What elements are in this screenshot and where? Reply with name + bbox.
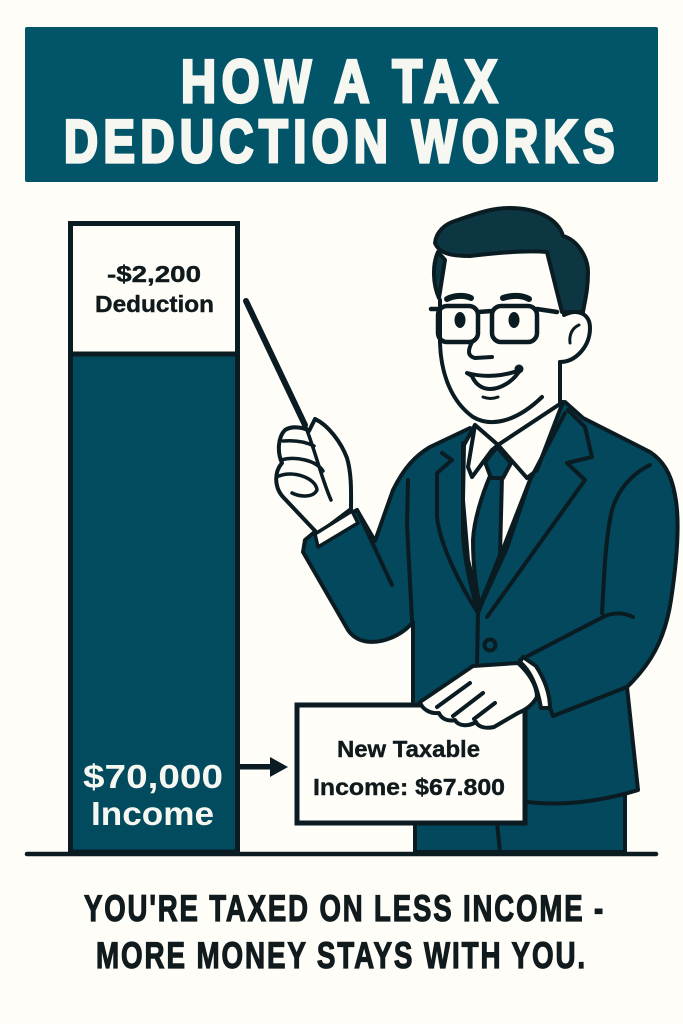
lower cuff [520,657,550,708]
ground line [27,852,656,856]
pointing hand [276,419,351,534]
sign: new taxable income: New Taxable [337,736,480,762]
sign: new taxable income: Income: $67.800 [313,774,505,800]
pointer [246,301,305,425]
pointer lower end [305,425,331,500]
income bar chart [70,224,238,852]
title banner [25,27,658,182]
jacket button [484,640,496,650]
deduction label: Deduction [95,291,214,317]
deduction label [95,261,214,317]
holding hand [420,663,537,728]
tie [473,447,511,605]
neck and face [440,250,590,423]
title banner: HOW A TAX [181,48,503,115]
glasses [431,306,557,342]
conclusion text [84,888,605,976]
eyebrows [447,296,529,299]
nose [469,342,492,358]
jacket [303,402,678,804]
lower sleeve edge [550,687,627,716]
collar [468,402,563,478]
lapel lines [357,410,650,663]
income label: Income [91,795,214,832]
hair [435,208,588,312]
trousers [415,790,625,852]
hair sideburn [434,252,445,298]
income label: $70,000 [83,758,223,795]
arrow to sign [240,757,288,777]
shirt [463,402,563,607]
presenter [246,208,678,852]
deduction label: -$2,200 [107,261,201,287]
cuff raised [315,511,358,547]
income label [83,758,223,832]
eyes [454,312,520,328]
mouth [467,366,522,398]
sign: new taxable income [297,705,525,823]
